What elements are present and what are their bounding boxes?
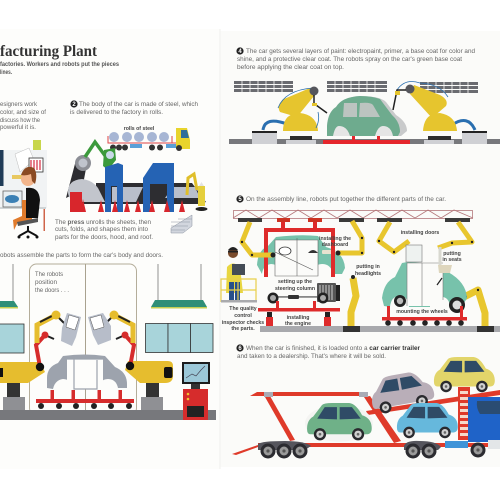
- press text: The press unrolls the sheets, then: [55, 219, 152, 226]
- assembly labels: putting in: [356, 264, 380, 270]
- step 6 text: When the car is finished, it is loaded onto a car carrier trailer: [246, 345, 421, 352]
- flap panel: [30, 264, 136, 415]
- step 1 text: powerful it is.: [0, 124, 36, 131]
- ceiling vents: [234, 81, 478, 93]
- red car skid: [36, 390, 134, 403]
- teal car with doors and seats: [382, 245, 467, 313]
- step 2 text: 2: [72, 102, 76, 108]
- step 6 text: 6: [238, 346, 242, 352]
- assembly labels: steering column: [275, 286, 315, 292]
- assembly floor: [260, 326, 500, 332]
- flap text: the doors . . .: [35, 287, 69, 294]
- icon: stack of pressed parts: [171, 215, 192, 233]
- flap text: [35, 271, 69, 294]
- assembly labels: the engine: [285, 321, 311, 327]
- engine and chassis: [258, 283, 340, 326]
- intro text: lines.: [0, 69, 12, 76]
- flap text: The robots: [35, 271, 63, 278]
- assembly labels: installing: [287, 315, 309, 321]
- step 5 text: 5: [238, 197, 242, 203]
- trailer wheels: [258, 441, 486, 458]
- assembly labels: mounting the wheels: [396, 309, 448, 315]
- yellow car: [434, 357, 495, 392]
- assembly labels: putting: [443, 251, 461, 257]
- second skid: [382, 306, 467, 326]
- assembly labels: headlights: [355, 271, 381, 277]
- control console: [182, 362, 210, 420]
- truss mounts: [238, 218, 470, 222]
- step 4 text: 4: [238, 49, 242, 55]
- factory floor left: [0, 410, 216, 420]
- inspector caption: [222, 306, 264, 332]
- truck cab: [445, 397, 500, 449]
- step 1 text: discuss how the: [0, 117, 40, 124]
- teal car under assembly: [257, 235, 345, 276]
- lights: [0, 264, 207, 308]
- assembly labels: dashboard: [322, 242, 348, 248]
- car body shell: [47, 354, 127, 389]
- press text: [55, 219, 153, 241]
- inspector: [221, 247, 257, 302]
- inspector caption: inspector checks: [222, 320, 264, 326]
- right paint robot: [393, 82, 487, 144]
- title: facturing Plant: [0, 43, 98, 60]
- steel press line: [66, 142, 208, 212]
- factory windows: [0, 324, 213, 353]
- step 5 text: On the assembly line, robots put together the different parts of the car.: [246, 196, 446, 203]
- paint line floor: [229, 136, 500, 144]
- assembly labels: installing the: [319, 236, 351, 242]
- step 4 text: before applying the clear coat on top.: [237, 64, 344, 71]
- inspector caption: the parts.: [231, 326, 255, 332]
- assembly labels: [275, 230, 462, 327]
- green car: [305, 403, 373, 442]
- left paint robot: [252, 86, 327, 144]
- assembly labels: installing doors: [401, 230, 439, 236]
- green painted car: [327, 96, 407, 136]
- skid wheels: [38, 403, 132, 409]
- steel delivery truck: [108, 126, 190, 151]
- press text: parts for the doors, hood, and roof.: [55, 234, 153, 241]
- flap text: position: [35, 279, 58, 286]
- overhead truss: [233, 210, 473, 218]
- step 4 text: The car gets several layers of paint: electropaint, primer, a base coat for color and: [246, 48, 476, 55]
- blue car: [397, 403, 458, 438]
- assembly robots: [242, 221, 485, 330]
- robot joints: [241, 237, 479, 299]
- red gantry: [266, 222, 333, 277]
- assembly labels: setting up the: [278, 279, 312, 285]
- inspector caption: control: [234, 313, 252, 319]
- step 6 text: [236, 344, 421, 360]
- intro text: factories. Workers and robots put the pieces: [0, 61, 120, 68]
- mauve car: [368, 369, 436, 415]
- step 3 text: obots assemble the parts to form the car's body and doors.: [0, 252, 163, 259]
- press text: cuts, folds, and shapes them into: [55, 226, 149, 233]
- step 2 text: [70, 100, 199, 116]
- door robots: [0, 310, 173, 410]
- step 1 text: esigners work: [0, 101, 38, 108]
- step 1 text: color, and size of: [0, 109, 46, 116]
- step 1 text: [0, 101, 46, 131]
- steel delivery truck: rolls of steel: [124, 126, 155, 132]
- step 4 text: shine, and a protective clear coat. The robots spray on the car's green base coat: [237, 56, 462, 63]
- assembly labels: in seats: [442, 257, 462, 263]
- step 2 text: is delivered to the factory in rolls.: [70, 109, 163, 116]
- inspector caption: The quality: [229, 306, 257, 312]
- step 4 text: [236, 47, 476, 71]
- step 2 text: The body of the car is made of steel, which: [79, 101, 199, 108]
- car carrier trailer frame: [232, 387, 500, 455]
- step 6 text: and taken to a dealership. That's where it will be sold.: [237, 353, 386, 360]
- intro text: [0, 61, 120, 76]
- designer illustration: [0, 140, 47, 238]
